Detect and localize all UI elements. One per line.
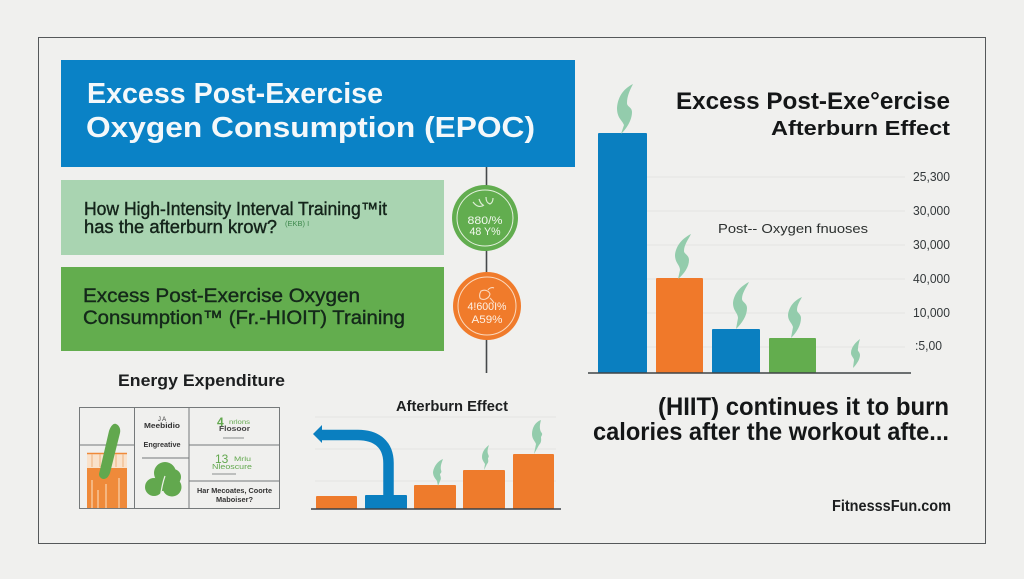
panel: EPOC HIIT training: Consumption™ (Fr.-HIOIT) Training bbox=[83, 307, 405, 329]
title banner: Excess Post-Exercise bbox=[87, 78, 383, 110]
chart: post-oxygen bar chart bbox=[588, 84, 950, 373]
table labels: 13 bbox=[215, 452, 229, 466]
table labels bbox=[144, 415, 272, 504]
table labels: nrlons bbox=[229, 419, 251, 426]
text block: HIIT takeaway: (HIIT) continues it to burn bbox=[658, 393, 949, 421]
title banner bbox=[61, 60, 575, 167]
badge: orange percentage: A59% bbox=[472, 314, 503, 326]
table labels: Flosoor bbox=[219, 426, 250, 433]
text block: HIIT takeaway: calories after the workout afte... bbox=[593, 418, 949, 446]
icons: green flames over bars bbox=[617, 84, 860, 368]
heading: chart title bbox=[676, 88, 950, 140]
y axis values: 40,000 bbox=[913, 272, 950, 286]
table labels: Maboiser? bbox=[216, 495, 253, 504]
badge: green percentage bbox=[452, 185, 518, 251]
heading: afterburn effect: Afterburn Effect bbox=[396, 399, 508, 415]
table labels: Har Mecoates, Coorte bbox=[197, 486, 272, 495]
icon: green clover leaf bbox=[145, 462, 182, 499]
table labels: Nleoscure bbox=[212, 464, 252, 471]
energy expenditure table bbox=[79, 407, 280, 509]
y axis values bbox=[913, 170, 950, 353]
bars bbox=[598, 133, 816, 373]
y axis values: 30,000 bbox=[913, 238, 950, 252]
badge: orange percentage bbox=[453, 272, 521, 340]
badge: green percentage: 880/% bbox=[468, 215, 503, 227]
badge: orange percentage: 4!600I% bbox=[468, 301, 507, 313]
panel: HIIT afterburn question bbox=[61, 180, 444, 255]
table labels: J A bbox=[158, 417, 166, 423]
brand: FitnessFun.com: FitnesssFun.com bbox=[832, 498, 951, 515]
panel: HIIT afterburn question: (EKB) I bbox=[285, 219, 309, 228]
icon: orange drink with green straw bbox=[87, 424, 127, 508]
panel: EPOC HIIT training bbox=[61, 267, 444, 351]
chart: afterburn effect small bars bbox=[311, 399, 561, 509]
chart label: Post-- Oxygen fnuoses bbox=[718, 221, 869, 236]
title banner: Oxygen Consumption (EPOC) bbox=[86, 112, 535, 144]
heading: energy expenditure: Energy Expenditure bbox=[118, 372, 285, 390]
y axis values: 10,000 bbox=[913, 306, 950, 320]
panel: HIIT afterburn question: How High-Intensity Interval Training™it bbox=[84, 199, 387, 219]
table labels: Meebidio bbox=[144, 421, 180, 430]
table labels: 4 bbox=[217, 415, 224, 429]
icons: green flames bbox=[433, 420, 542, 486]
panel: EPOC HIIT training: Excess Post-Exercise Oxygen bbox=[83, 285, 360, 307]
gridlines bbox=[647, 177, 905, 347]
arrow: blue curved left arrow bbox=[313, 425, 388, 497]
y axis values: :5,00 bbox=[915, 339, 942, 353]
panel: HIIT afterburn question: has the afterburn krow? bbox=[84, 217, 277, 237]
heading: chart title: Excess Post-Exe°ercise bbox=[676, 88, 950, 115]
table labels: Engreative bbox=[144, 440, 180, 449]
heading: chart title: Afterburn Effect bbox=[771, 117, 950, 140]
table labels: Mrlu bbox=[234, 456, 252, 463]
text block: HIIT takeaway bbox=[593, 393, 949, 446]
y axis values: 25,300 bbox=[913, 170, 950, 184]
y axis values: 30,000 bbox=[913, 204, 950, 218]
badge: green percentage: 48 Y% bbox=[470, 226, 501, 238]
